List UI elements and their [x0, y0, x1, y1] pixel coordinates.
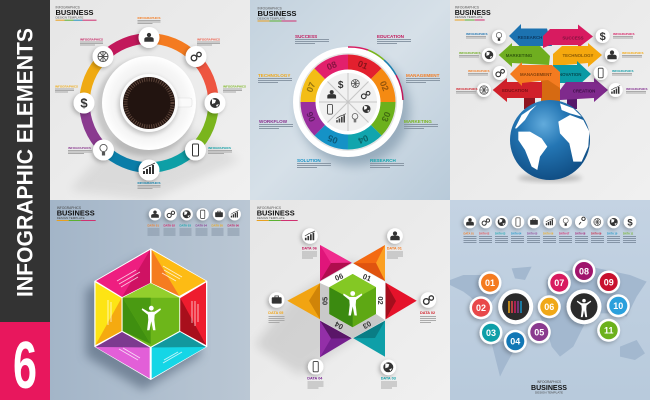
data labels: DATA 11	[623, 232, 634, 236]
circle 03	[480, 321, 502, 344]
band numbers: 06	[333, 271, 345, 283]
heading	[257, 206, 298, 220]
labels: INFOGRAPHICS	[223, 84, 246, 88]
data labels: DATA 04	[511, 232, 522, 236]
labels: SOLUTION	[297, 158, 321, 163]
labels: INFOGRAPHICS	[459, 51, 481, 55]
arrow: management: MANAGEMENT	[520, 72, 552, 77]
data labels	[268, 246, 436, 388]
data labels: DATA 04	[307, 376, 323, 380]
circle 09: 09	[604, 277, 614, 287]
ring segments	[84, 38, 214, 168]
triangle: red	[386, 283, 417, 319]
heading: BUSINESS	[531, 383, 567, 392]
ring numbers	[304, 58, 393, 146]
triangle: amber	[287, 283, 320, 319]
ring numbers: 02	[378, 79, 391, 93]
icon: dollar	[596, 29, 610, 43]
circle 01: 01	[485, 278, 495, 288]
arrow stems	[524, 80, 577, 109]
band hexagon	[320, 263, 385, 338]
labels: MANAGEMENT	[406, 73, 440, 78]
data labels: DATA 10	[607, 232, 618, 236]
data labels: DATA 03	[180, 224, 191, 228]
icon: chart	[302, 228, 318, 244]
labels: INFOGRAPHICS	[466, 32, 488, 36]
heading: DESIGN TEMPLATE	[257, 216, 285, 220]
arrow: education: EDUCATION	[502, 88, 528, 93]
arrow: creation	[560, 78, 608, 102]
sector: cyan	[152, 332, 206, 378]
circle 02	[470, 296, 492, 319]
panel: world map	[450, 200, 650, 400]
labels: INFOGRAPHICS	[55, 84, 78, 88]
labels: INFOGRAPHICS	[468, 69, 490, 73]
arrow: education	[493, 78, 542, 102]
icon: globe	[380, 360, 396, 375]
inner disc	[316, 70, 380, 134]
band numbers	[321, 271, 385, 331]
data labels: DATA 02	[164, 224, 175, 228]
data labels	[464, 232, 636, 242]
band numbers: 04	[332, 319, 345, 331]
band numbers: 01	[361, 272, 373, 283]
ring numbers: 05	[326, 133, 339, 146]
hub: colored bars	[498, 289, 533, 324]
heading: INFOGRAPHICS	[57, 206, 81, 210]
icon: person	[138, 27, 160, 48]
data labels: DATA 05	[527, 232, 538, 236]
data labels: DATA 06	[543, 232, 554, 236]
ring segments	[308, 62, 388, 142]
heading	[531, 380, 567, 394]
arrow: innovation: INNOVATION	[555, 72, 581, 77]
labels: INFOGRAPHICS	[68, 146, 91, 150]
circle 09	[597, 270, 620, 294]
arrow: technology	[553, 43, 602, 67]
circle 11	[597, 319, 620, 342]
icon: dollar	[74, 92, 94, 114]
labels: RESEARCH	[370, 158, 396, 163]
arrow: marketing: MARKETING	[506, 53, 533, 58]
icon: dollar: $	[80, 96, 88, 110]
data labels: DATA 02	[420, 311, 435, 315]
data labels: DATA 05	[268, 311, 283, 315]
data labels: DATA 09	[591, 232, 602, 236]
icon: gears	[186, 46, 206, 67]
labels: INFOGRAPHICS	[612, 69, 634, 73]
icon row	[464, 216, 636, 228]
circle 04: 04	[510, 337, 520, 347]
data labels: DATA 01	[148, 224, 159, 228]
heading: INFOGRAPHICS	[537, 380, 561, 384]
data labels: DATA 04	[196, 224, 207, 228]
data labels: DATA 02	[479, 232, 490, 236]
icon: person	[605, 48, 619, 62]
data labels: DATA 08	[575, 232, 586, 236]
heading: INFOGRAPHICS	[56, 5, 80, 9]
icon: phone	[308, 359, 324, 375]
icon: gears	[493, 66, 507, 80]
arrow: success: SUCCESS	[562, 36, 584, 40]
icon: bulb	[93, 140, 114, 160]
circle 07	[548, 271, 571, 294]
labels	[456, 32, 648, 93]
sidebar title: INFOGRAPHIC ELEMENTS	[13, 28, 38, 297]
icon: chart	[138, 160, 160, 180]
circle 02: 02	[476, 303, 486, 313]
arrow: management	[510, 62, 560, 88]
heading: DESIGN TEMPLATE	[455, 15, 483, 19]
ring numbers: 07	[304, 81, 318, 94]
heading	[258, 6, 296, 21]
arrow: research: RESEARCH	[518, 35, 542, 40]
heading: INFOGRAPHICS	[257, 206, 281, 210]
long shadow	[255, 260, 385, 375]
heading: DESIGN TEMPLATE	[258, 16, 285, 20]
icon: globe	[482, 48, 496, 62]
labels: INFOGRAPHICS	[622, 51, 644, 55]
triangle: purple	[320, 321, 352, 357]
heading: BUSINESS	[57, 208, 95, 218]
circle 10: 10	[613, 301, 623, 311]
triangle: teal	[353, 321, 385, 357]
labels: MARKETING	[404, 119, 432, 124]
world map	[450, 267, 647, 377]
sector: magenta	[96, 332, 150, 378]
heading: BUSINESS	[257, 208, 295, 218]
icon: phone	[185, 140, 206, 160]
numbered circles	[470, 260, 630, 353]
heading: INFOGRAPHICS	[455, 6, 479, 10]
heading	[57, 206, 96, 220]
circle 06	[538, 295, 561, 318]
heading: DESIGN TEMPLATE	[56, 15, 83, 19]
rainbow edge	[348, 47, 403, 100]
panel: star	[250, 200, 450, 400]
hexagon sector captions	[108, 266, 198, 363]
data labels: DATA 03	[495, 232, 506, 236]
band numbers: 02	[376, 296, 385, 305]
labels: INFOGRAPHICS	[208, 146, 231, 150]
icon: gears	[420, 292, 436, 308]
heading: BUSINESS	[56, 8, 94, 17]
band numbers: 03	[361, 319, 373, 331]
arrow: technology: TECHNOLOGY	[563, 53, 594, 58]
circle 04	[504, 330, 527, 353]
arrow: marketing	[499, 43, 550, 67]
globe	[510, 100, 590, 182]
ring numbers: 04	[357, 133, 370, 146]
ring numbers: 08	[325, 59, 338, 72]
icon: brain	[477, 83, 491, 97]
hexagon	[94, 248, 207, 380]
center hexagon	[329, 274, 376, 327]
icon: chart	[609, 83, 623, 97]
hub: person	[566, 289, 602, 324]
icon row: $	[627, 218, 633, 228]
ring numbers: 03	[379, 110, 393, 123]
labels	[258, 34, 440, 168]
center hexagon	[123, 283, 179, 347]
heading: INFOGRAPHICS	[258, 6, 282, 10]
labels: INFOGRAPHICS	[197, 38, 220, 42]
ring numbers: 06	[304, 110, 318, 123]
heading: DESIGN TEMPLATE	[57, 216, 85, 220]
sector: crimson	[96, 250, 150, 297]
labels: INFOGRAPHICS	[613, 32, 635, 36]
arrow: research	[509, 24, 552, 48]
circle 05	[528, 320, 551, 344]
circle 03: 03	[486, 328, 496, 338]
sidebar	[0, 0, 50, 400]
triangle: crimson	[320, 245, 352, 281]
panel: wheel chart	[250, 0, 450, 200]
circle 06: 06	[544, 302, 554, 312]
coffee cup	[96, 56, 196, 156]
circle 11: 11	[604, 326, 613, 336]
circle 05: 05	[534, 327, 544, 337]
data labels: DATA 06	[228, 224, 239, 228]
heading	[455, 6, 491, 20]
icon: phone	[594, 66, 608, 80]
heading: BUSINESS	[258, 9, 296, 18]
labels: INFOGRAPHICS	[80, 38, 103, 42]
icon row	[149, 208, 241, 220]
hexagon shadow	[86, 256, 200, 390]
icon: dollar: $	[600, 31, 606, 43]
labels: SUCCESS	[295, 34, 317, 39]
labels: INFOGRAPHICS	[626, 87, 648, 91]
data labels: DATA 05	[212, 224, 223, 228]
icon: brain	[92, 46, 114, 67]
icon: person	[387, 228, 403, 244]
ring numbers: 01	[356, 58, 369, 72]
heading: BUSINESS	[455, 8, 491, 17]
labels: INFOGRAPHICS	[138, 181, 161, 185]
icon: bulb	[492, 30, 506, 44]
data labels: DATA 01	[464, 232, 474, 236]
circle 10	[607, 294, 630, 317]
data labels	[148, 224, 240, 235]
icon: briefcase	[269, 292, 285, 308]
heading	[56, 5, 96, 20]
labels: TECHNOLOGY	[258, 73, 290, 78]
outer disc	[293, 47, 403, 157]
sector: red	[180, 282, 206, 345]
circle 07: 07	[554, 278, 564, 288]
circle 08	[572, 260, 596, 282]
circle 01	[478, 271, 502, 294]
panel: arrows and globe	[450, 0, 650, 200]
arrow: innovation	[553, 61, 591, 87]
labels	[55, 16, 246, 188]
inner disc: $	[338, 80, 344, 91]
labels: EDUCATION	[377, 34, 405, 39]
panel: coffee cup ring	[50, 0, 250, 200]
labels: INFOGRAPHICS	[456, 87, 478, 91]
labels: WORKFLOW	[259, 119, 288, 124]
arrow: success	[543, 24, 593, 48]
arrow: creation: CREATION	[573, 88, 595, 94]
icon: globe	[204, 92, 226, 114]
band numbers: 05	[321, 297, 330, 305]
sector: orange yellow	[152, 250, 206, 296]
triangle: orange	[353, 245, 385, 281]
labels: INFOGRAPHICS	[138, 16, 161, 20]
circle 08: 08	[579, 266, 589, 276]
data labels: DATA 07	[559, 232, 570, 236]
data labels: DATA 06	[302, 246, 317, 250]
data labels: DATA 01	[387, 246, 402, 250]
heading: DESIGN TEMPLATE	[535, 390, 563, 394]
data labels: DATA 03	[381, 376, 396, 380]
sector: yellow	[96, 282, 122, 345]
panel: hexagon	[50, 200, 250, 400]
